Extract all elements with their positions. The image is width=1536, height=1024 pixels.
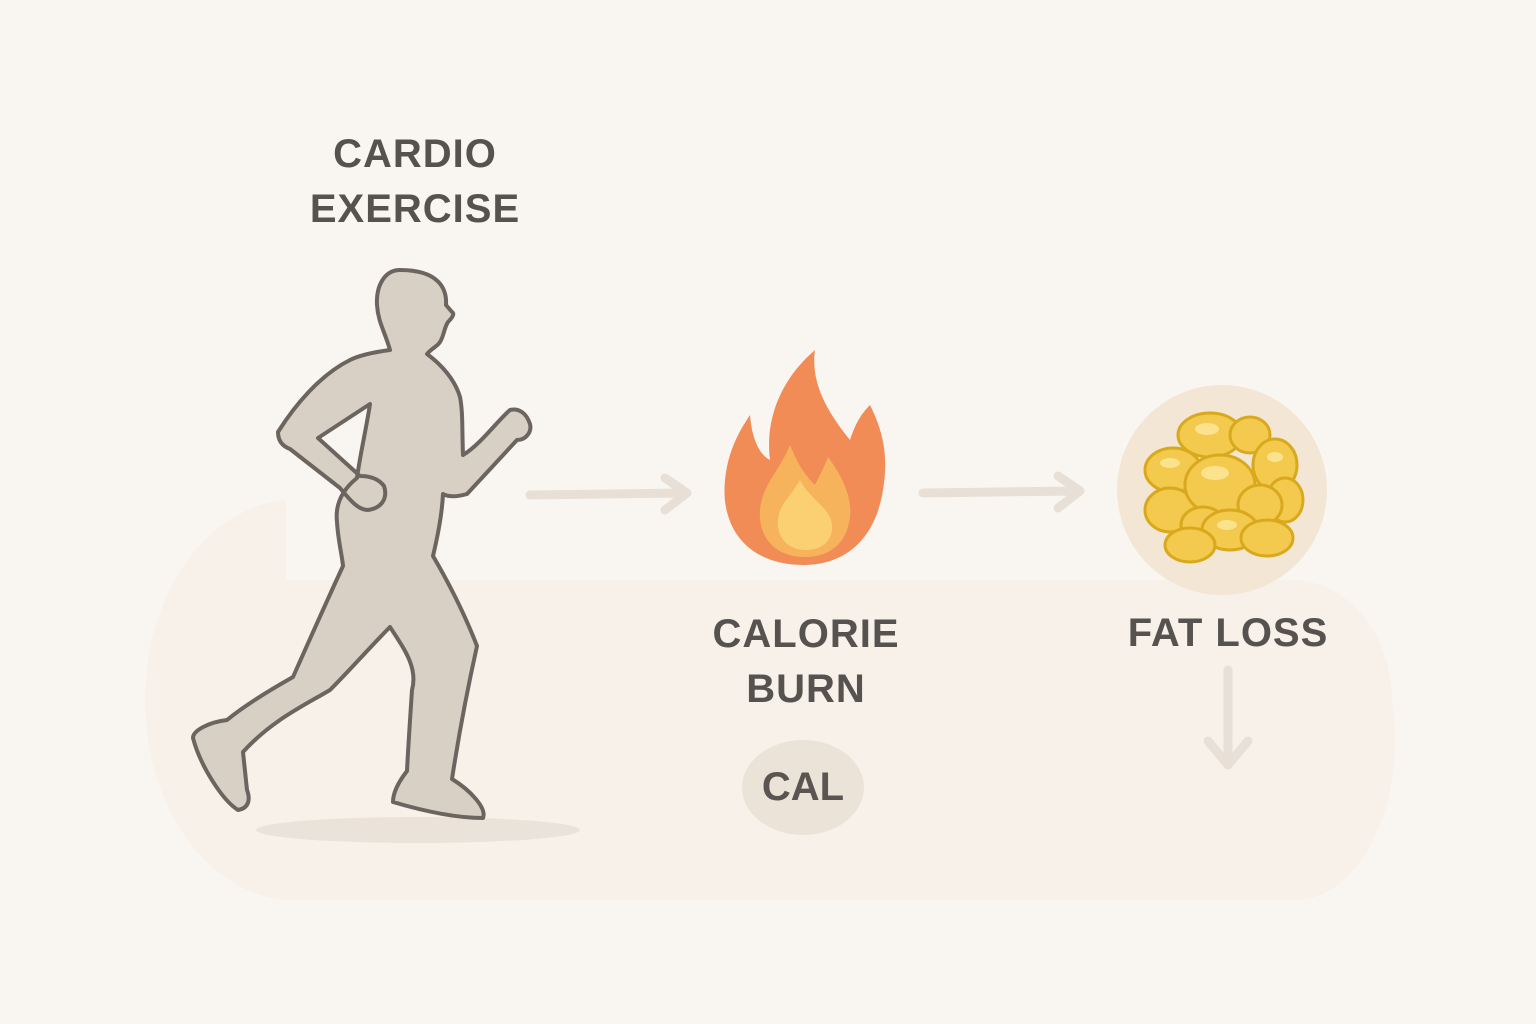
arrow: runner to flame [526,474,692,514]
badge: CAL [742,740,864,835]
title: calorie burn [712,612,900,711]
icon: flame [724,350,886,565]
title: cardio exercise: CARDIO [333,132,497,176]
arrow: down [1204,666,1252,770]
badge: CAL: CAL [762,765,844,809]
title: calorie burn: BURN [746,667,866,711]
title: calorie burn: CALORIE [712,612,900,656]
title: cardio exercise [310,132,520,231]
arrow: flame to fat [918,472,1084,512]
title: cardio exercise: EXERCISE [310,187,520,231]
title: fat loss: FAT LOSS [1128,611,1328,655]
icon: fat cells [1117,385,1327,595]
